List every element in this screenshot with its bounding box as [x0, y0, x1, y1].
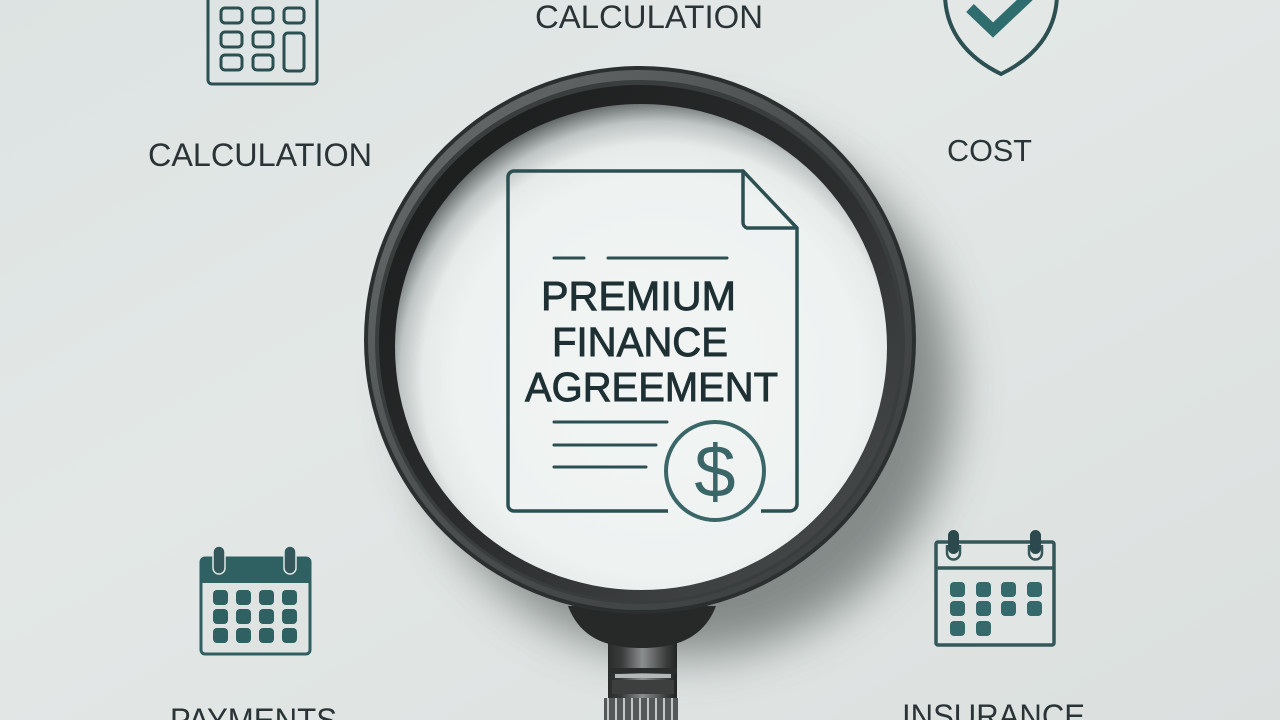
dollar coin [666, 422, 764, 520]
label: calculation left: CALCULATION [148, 137, 372, 173]
magnifier rim [364, 66, 916, 614]
document text lines [554, 258, 727, 467]
document title: FINANCE [552, 319, 728, 365]
document outline [508, 171, 797, 511]
icon: insurance calendar [936, 530, 1054, 645]
document title: PREMIUM [541, 273, 736, 319]
icon: calculator [208, 0, 317, 84]
icon: payments calendar [200, 546, 310, 654]
icon: shield with check [945, 0, 1057, 74]
magnifier drop shadow [410, 120, 954, 656]
dollar coin: $ [694, 430, 736, 513]
magnifier lens [395, 104, 887, 590]
label: calculation top: CALCULATION [535, 0, 763, 35]
label: cost: COST [947, 133, 1032, 168]
magnifier handle [568, 606, 716, 720]
document title [525, 273, 778, 410]
document title: AGREEMENT [525, 364, 778, 410]
magnifying glass [364, 66, 954, 720]
document icon [508, 171, 797, 520]
